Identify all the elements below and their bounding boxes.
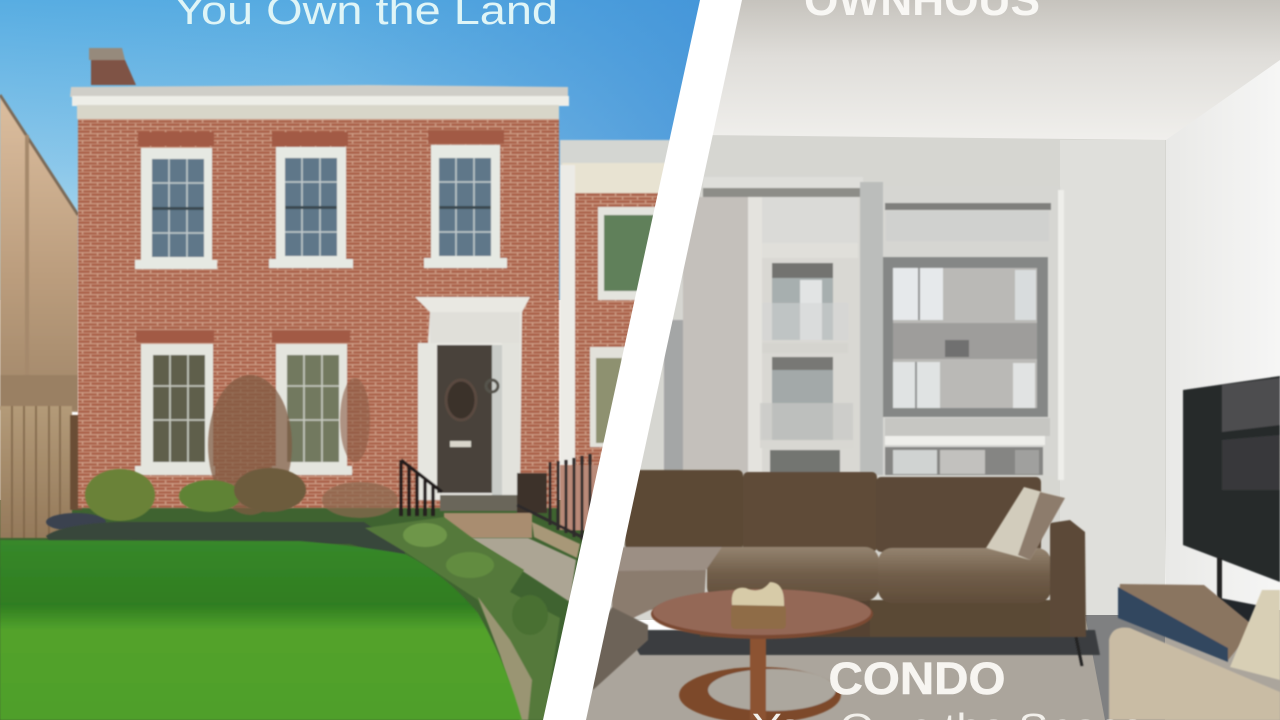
dark hedge border (46, 522, 405, 554)
ground base (0, 500, 584, 720)
shadow under sofa (625, 630, 1100, 655)
TV and stand (1183, 376, 1280, 624)
stair railing (401, 460, 442, 516)
fence railing and planter (517, 473, 547, 513)
light green shrubs (365, 517, 560, 720)
armchair (1109, 590, 1280, 720)
right wall (1166, 60, 1280, 640)
lower windows (141, 344, 213, 472)
wall right of window (1060, 140, 1165, 620)
upper windows (141, 148, 212, 264)
lawn (0, 540, 522, 720)
chimney (89, 48, 136, 85)
grey floor by sofa (1085, 615, 1165, 720)
floor (580, 610, 1280, 720)
cushion (986, 487, 1065, 560)
diagonal white divider (543, 0, 742, 720)
sofa (592, 470, 1086, 690)
window wall (664, 177, 1064, 480)
sky (0, 0, 702, 300)
panel: condo (580, 0, 1280, 720)
stone path (470, 538, 576, 602)
upper lintels (138, 132, 214, 146)
cornice (70, 85, 568, 97)
wooden fence (0, 406, 82, 538)
media console (1118, 584, 1255, 662)
neighbouring house on the right (560, 140, 672, 530)
ceiling (680, 0, 1280, 140)
panel: house (0, 0, 702, 720)
heading: CONDO: CONDO (828, 653, 1006, 704)
door surround (415, 297, 530, 500)
tree and shrubs by windows (46, 375, 398, 531)
neighbouring tan building (0, 95, 78, 412)
coffee table (651, 582, 873, 720)
main brick facade (70, 85, 600, 558)
back wall (600, 135, 1170, 620)
steps (440, 495, 524, 511)
